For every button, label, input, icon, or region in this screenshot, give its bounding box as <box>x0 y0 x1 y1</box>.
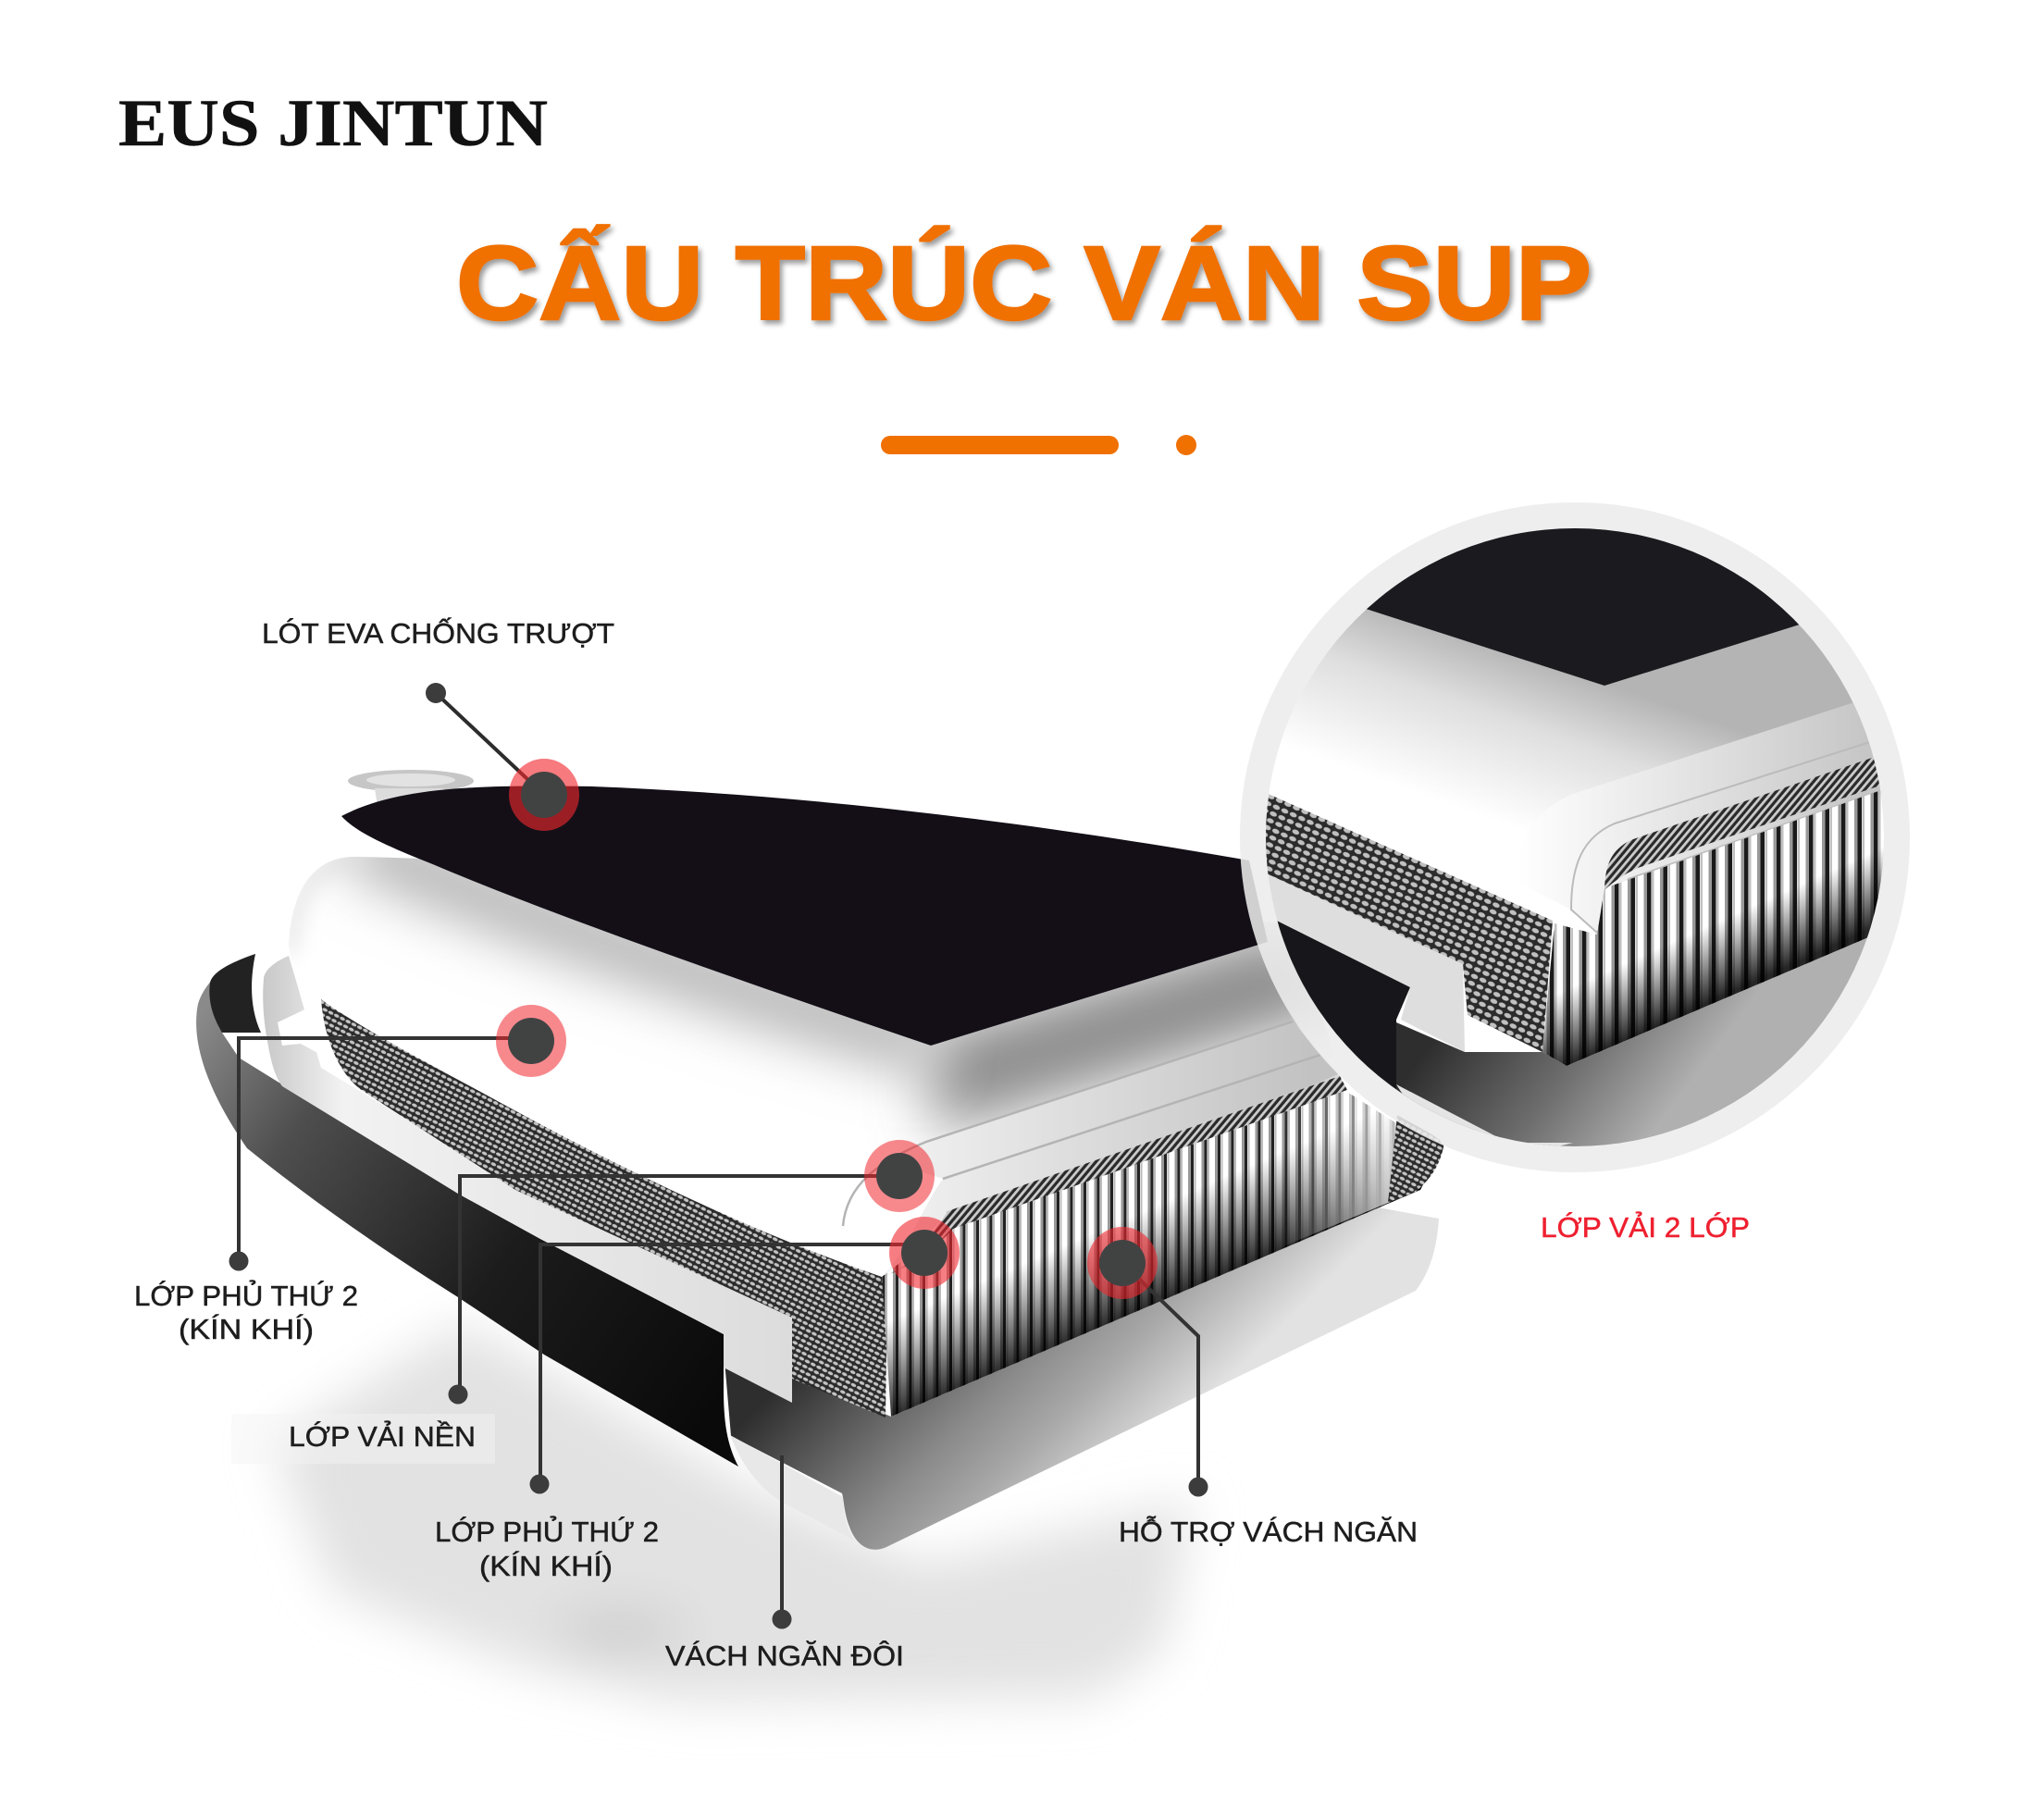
label: LỚP PHỦ THỨ 2 (KÍN KHÍ) center <box>435 1515 659 1582</box>
inset lower white lip <box>1396 1084 1573 1145</box>
inset ribs <box>1542 785 1897 1066</box>
drop-stitch ribs <box>882 1087 1443 1417</box>
marker: second coating left <box>496 1005 566 1077</box>
bottom grey layer <box>725 1207 1439 1550</box>
top white body <box>289 857 1340 1277</box>
title: CẤU TRÚC VÁN SUP <box>456 225 1592 341</box>
inset black deck <box>1366 528 1799 686</box>
leader: HỖ TRỢ VÁCH NGĂN <box>1122 1263 1198 1487</box>
callouts: leaders and markers <box>229 683 1208 1628</box>
illustration: SUP board cross-section <box>196 770 1443 1550</box>
valve <box>348 770 474 819</box>
inset white tape <box>1258 870 1465 1052</box>
marker: EVA deck <box>509 759 579 831</box>
inset magnifier <box>1253 500 1897 1159</box>
strap inner dark face <box>209 954 261 1033</box>
inset inner rail band <box>1571 741 1892 933</box>
white tape <box>263 956 792 1403</box>
label: LỚP VẢI NỀN: LỚP VẢI NỀN <box>289 1420 476 1453</box>
outer black strap <box>196 954 738 1467</box>
magnifier contents <box>1258 500 1897 1157</box>
logo: EUS JINTUN: EUS JINTUN <box>118 86 548 160</box>
label: LỚP PHỦ THỨ 2 (KÍN KHÍ) center: LỚP PHỦ THỨ 2 <box>435 1515 659 1548</box>
inset rail bands <box>1567 703 1869 909</box>
label backdrop patch <box>231 1414 495 1464</box>
label: VÁCH NGĂN ĐÔI: VÁCH NGĂN ĐÔI <box>665 1640 904 1672</box>
corner highlight <box>843 1161 943 1277</box>
inset white body <box>1289 528 1884 847</box>
black EVA deck <box>341 786 1268 1046</box>
marker: second coating center <box>889 1217 960 1289</box>
label: LỚP PHỦ THỨ 2 (KÍN KHÍ) center: (KÍN KHÍ) <box>479 1550 613 1582</box>
lower white strip <box>730 1435 853 1540</box>
leader: LỚP PHỦ THỨ 2 center <box>540 1244 923 1485</box>
rail bands <box>843 1021 1340 1277</box>
leader end dots <box>229 683 1208 1628</box>
leader: LÓT EVA CHỐNG TRƯỢT <box>436 693 544 795</box>
marker: base fabric <box>864 1140 935 1212</box>
label: LỚP PHỦ THỨ 2 (KÍN KHÍ) left: LỚP PHỦ THỨ 2 <box>134 1279 358 1312</box>
inset ribs fade <box>1542 849 1884 1066</box>
leader: LỚP VẢI NỀN <box>460 1176 899 1391</box>
marker: bulkhead support <box>1087 1227 1158 1299</box>
title divider: bar and dot <box>881 435 1196 455</box>
inset hatched band <box>1604 754 1883 890</box>
tape loop hole <box>278 1004 321 1055</box>
rail seam lines <box>843 1021 1320 1226</box>
ribs right whitening <box>1277 1073 1397 1249</box>
mesh side wall <box>321 999 887 1417</box>
body shading <box>289 837 1360 1133</box>
label: LỚP PHỦ THỨ 2 (KÍN KHÍ) left: (KÍN KHÍ) <box>179 1313 314 1345</box>
label: HỖ TRỢ VÁCH NGĂN: HỖ TRỢ VÁCH NGĂN <box>1119 1515 1418 1548</box>
leader: VÁCH NGĂN ĐÔI <box>780 1455 784 1619</box>
labels <box>134 616 1750 1672</box>
hatched top band <box>882 1076 1347 1277</box>
magnifier ring <box>1253 515 1897 1159</box>
inset black strap <box>1277 921 1410 1090</box>
ribs end mesh <box>1388 1115 1443 1203</box>
label: LỚP VẢI 2 LỚP: LỚP VẢI 2 LỚP <box>1541 1211 1750 1244</box>
label: LÓT EVA CHỐNG TRƯỢT: LÓT EVA CHỐNG TRƯỢT <box>262 616 614 650</box>
inset lower grey <box>1396 938 1867 1146</box>
leader: LỚP PHỦ THỨ 2 left <box>239 1038 530 1259</box>
ribs bottom fade <box>882 1087 1443 1417</box>
label: LỚP PHỦ THỨ 2 (KÍN KHÍ) left <box>134 1279 358 1345</box>
inset mesh <box>1264 792 1553 1052</box>
ground shadow <box>273 1323 1194 1702</box>
